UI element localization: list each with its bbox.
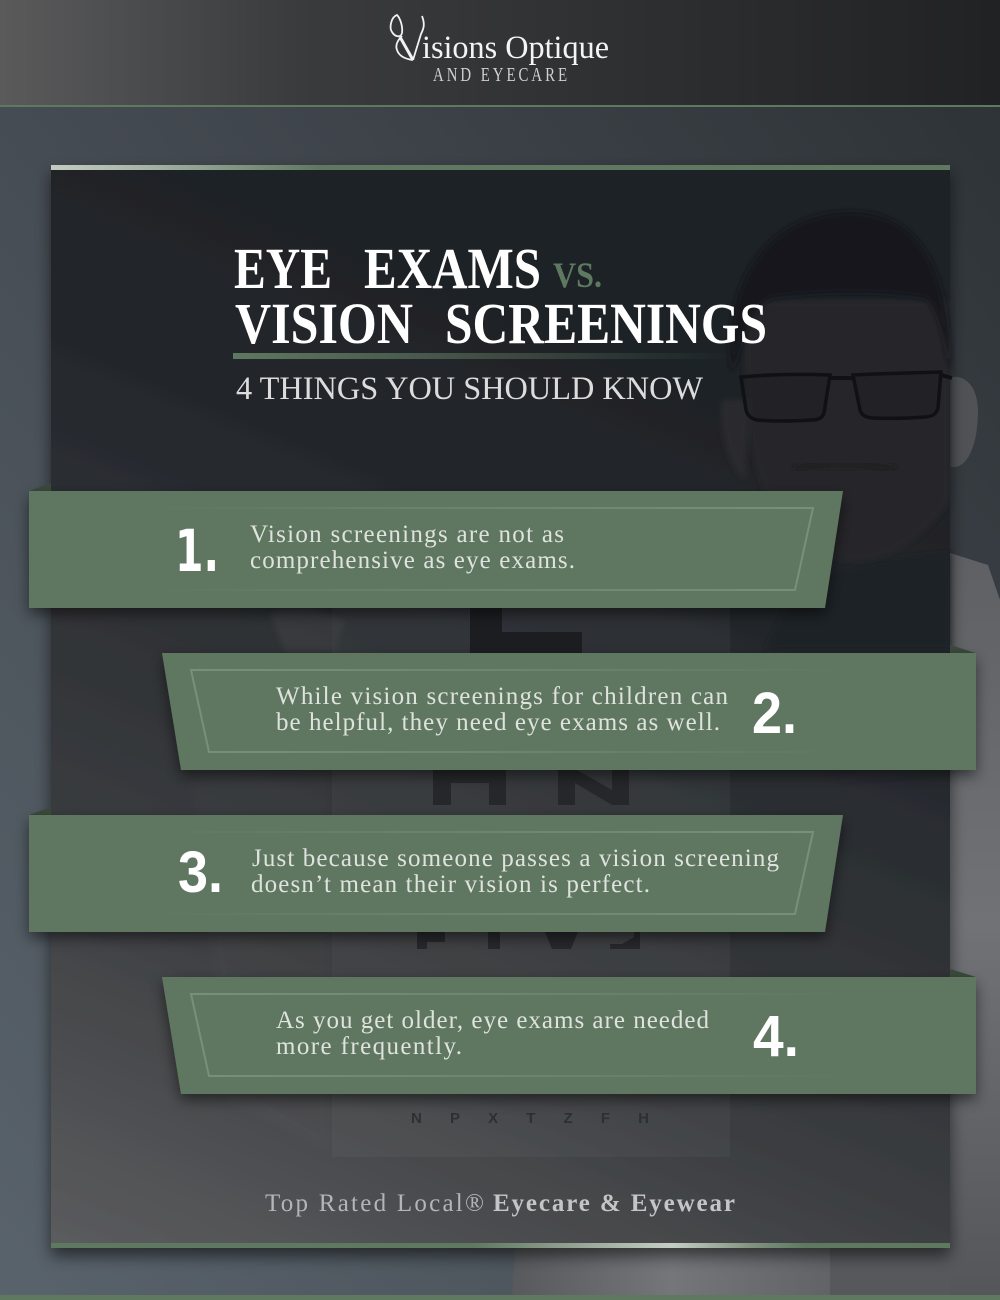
header band [0, 0, 1000, 107]
statement 2 [276, 683, 728, 736]
doctor photo inside panel [190, 212, 952, 1157]
heading: Eye Exams vs.: EXAMS [364, 236, 541, 301]
doctor figure [190, 212, 952, 1157]
footer tagline [265, 1190, 735, 1217]
title block [233, 236, 767, 407]
heading: Eye Exams vs.: VS. [553, 255, 602, 295]
statement 3: Just because someone passes a vision screening [252, 845, 780, 872]
title rule [233, 353, 733, 359]
statement 1 [250, 521, 575, 574]
eye chart [332, 600, 730, 1157]
statement 3 [251, 845, 780, 898]
ribbon 1 [29, 483, 843, 608]
ribbon fold [29, 807, 51, 815]
ribbon body [162, 653, 976, 770]
panel bottom accent bar [51, 1243, 950, 1248]
main panel [51, 165, 950, 1248]
eye chart: NPXTZFH [411, 1110, 649, 1127]
number 4: 4. [753, 1004, 799, 1069]
logo: Visions Optique and Eyecare: isions Optique [422, 30, 609, 66]
heading: Eye Exams vs. [234, 236, 602, 301]
statement 1: comprehensive as eye exams. [250, 547, 575, 574]
heading: Vision Screenings: SCREENINGS [445, 291, 767, 356]
ribbon body [29, 815, 843, 932]
ribbon 3 [29, 807, 843, 932]
logo: Visions Optique and Eyecare [391, 15, 609, 86]
statement 4: As you get older, eye exams are needed [276, 1007, 710, 1034]
subtitle: 4 THINGS YOU SHOULD KNOW [236, 371, 704, 407]
footer tagline: Eyecare & Eyewear [493, 1190, 735, 1217]
logo: Visions Optique and Eyecare: AND EYECARE [433, 64, 570, 86]
statement 4: more frequently. [276, 1033, 462, 1060]
heading: Vision Screenings: VISION [235, 291, 413, 356]
ribbon body [162, 977, 976, 1094]
heading: Eye Exams vs.: EYE [234, 236, 332, 301]
ribbon body [29, 491, 843, 608]
inner outline [150, 832, 813, 914]
number 1: 1. [175, 517, 219, 585]
ribbon fold [950, 645, 976, 653]
icon: eyeglasses V monogram [391, 15, 424, 60]
number 2: 2. [752, 681, 797, 746]
statement 3: doesn’t mean their vision is perfect. [251, 871, 650, 898]
ribbon 4 [162, 969, 976, 1094]
panel top accent bar [51, 165, 950, 170]
statement 4 [276, 1007, 710, 1060]
inner outline [191, 670, 850, 752]
inner outline [191, 994, 850, 1076]
statement 1: Vision screenings are not as [250, 521, 564, 548]
heading: Vision Screenings [235, 291, 767, 356]
footer tagline: Top Rated Local® [265, 1190, 484, 1217]
ribbon fold [950, 969, 976, 977]
ribbon 2 [162, 645, 976, 770]
background: doctor's white coat and ear [512, 377, 1000, 1295]
statement 2: While vision screenings for children can [276, 683, 728, 710]
icon: glasses [741, 372, 941, 421]
bottom page strip [0, 1295, 1000, 1300]
inner outline [150, 508, 813, 590]
statement 2: be helpful, they need eye exams as well. [276, 709, 720, 736]
ribbon fold [29, 483, 51, 491]
number 3: 3. [178, 840, 223, 905]
